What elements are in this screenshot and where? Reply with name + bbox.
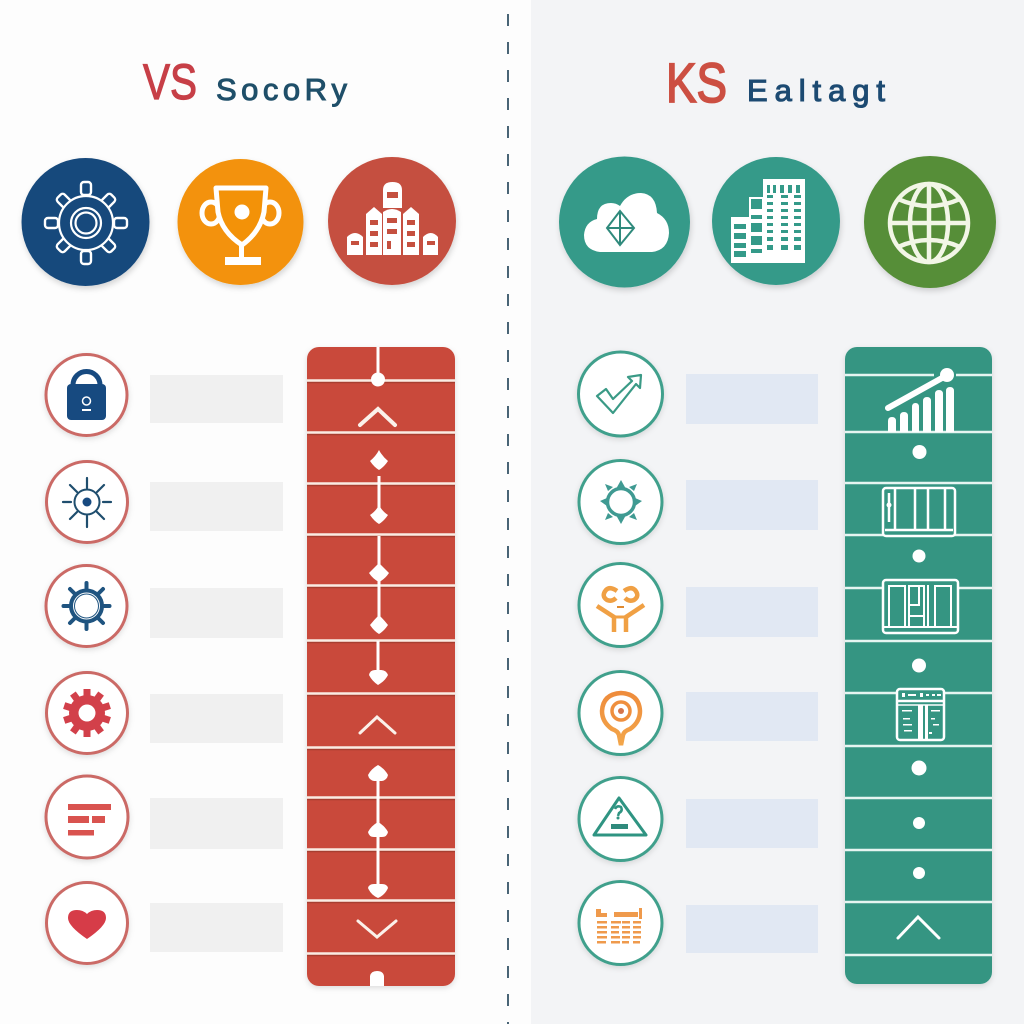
row 1 left: lock icon bbox=[46, 354, 127, 436]
panel: red timeline column bbox=[307, 347, 455, 986]
chevron bbox=[898, 917, 939, 938]
icon: red buildings badge bbox=[328, 157, 456, 285]
row 1 right: label placeholder bbox=[686, 374, 818, 424]
row 5 left: label placeholder bbox=[150, 798, 283, 849]
row 5 right: label placeholder bbox=[686, 799, 818, 848]
connector stems bbox=[378, 347, 379, 890]
icon: orange trophy badge bbox=[178, 159, 304, 285]
row 2 left: label placeholder bbox=[150, 482, 283, 531]
row 6 left: heart icon bbox=[46, 882, 128, 964]
row 6 right: orange table icon bbox=[579, 882, 662, 964]
row 4 left: label placeholder bbox=[150, 694, 283, 743]
icon: rising bar chart bbox=[888, 368, 954, 432]
icon: window frame one bbox=[883, 488, 955, 536]
row 2 right: teal gear icon bbox=[579, 460, 662, 544]
row 3 left: blue gear icon bbox=[46, 566, 127, 646]
title: VS SocoRy: VS bbox=[143, 54, 197, 110]
row 2 left: sun icon bbox=[46, 462, 128, 542]
row 5 left: text lines icon bbox=[46, 776, 128, 858]
row 1 right: check icon bbox=[578, 352, 662, 436]
row 2 right: label placeholder bbox=[686, 480, 818, 530]
row 3 left: label placeholder bbox=[150, 588, 283, 638]
chevrons bbox=[358, 409, 396, 937]
icon: window frame two bbox=[883, 580, 958, 633]
icon: teal office tower badge bbox=[712, 157, 840, 285]
row 6 right: label placeholder bbox=[686, 905, 818, 953]
row 4 right: target pin icon bbox=[579, 672, 662, 754]
row 1 left: label placeholder bbox=[150, 375, 283, 423]
icon: teal cloud badge bbox=[559, 156, 690, 288]
panel: teal timeline column bbox=[845, 347, 992, 984]
row 5 right: warning triangle icon bbox=[579, 778, 662, 860]
title: KS Ealtagt: KS bbox=[666, 51, 727, 114]
node markers bbox=[368, 372, 389, 986]
row 3 right: label placeholder bbox=[686, 587, 818, 637]
icon: green globe badge bbox=[864, 156, 996, 288]
icon: dashboard window bbox=[897, 689, 944, 740]
row 4 left: red gear icon bbox=[46, 672, 128, 754]
title: VS SocoRy: SocoRy bbox=[216, 72, 348, 107]
row 3 right: orange kidney icon bbox=[579, 564, 662, 646]
row 6 left: label placeholder bbox=[150, 903, 283, 952]
dot markers bbox=[912, 445, 926, 879]
title: KS Ealtagt: Ealtagt bbox=[747, 73, 885, 108]
title: VS SocoRy bbox=[143, 54, 348, 110]
icon: blue gear badge bbox=[22, 158, 150, 286]
row 4 right: label placeholder bbox=[686, 692, 818, 741]
title: KS Ealtagt bbox=[666, 51, 885, 114]
